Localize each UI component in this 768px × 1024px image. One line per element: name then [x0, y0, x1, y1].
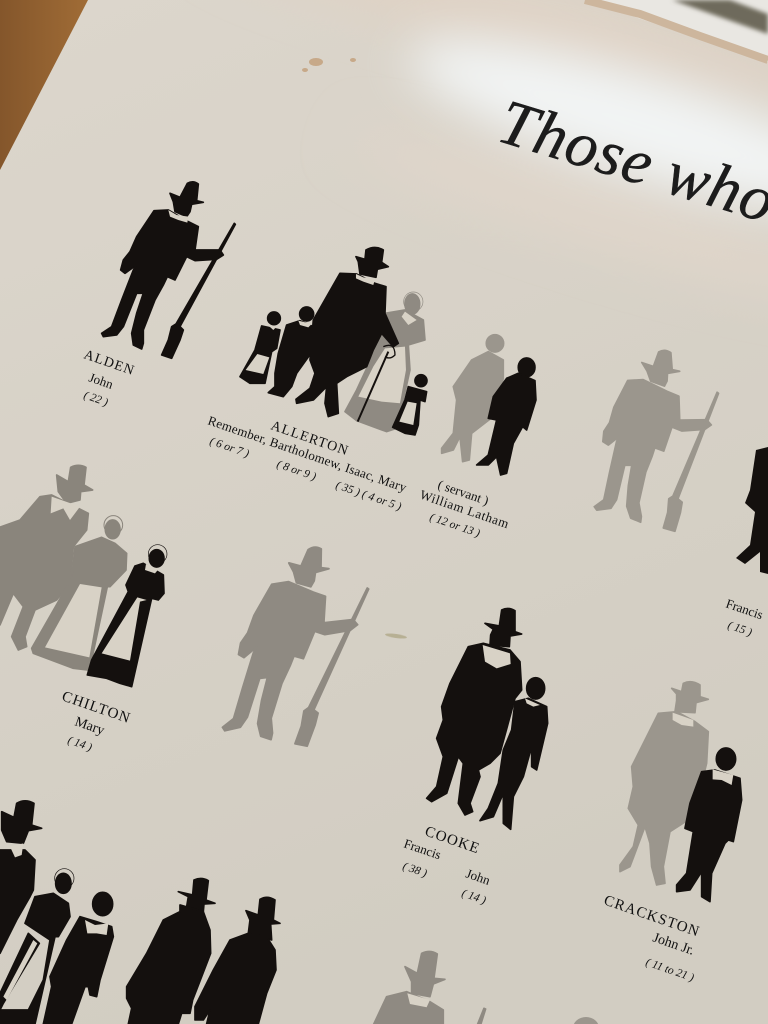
tan stain band along the top edge — [202, 0, 768, 128]
pale light glow behind the title — [396, 7, 768, 243]
label: Allerton names: ( 35 ) ( 4 or 5 ) — [334, 479, 403, 513]
collar — [168, 210, 188, 223]
John Cooke — [480, 678, 548, 829]
label: Cooke: Francis — [402, 836, 443, 862]
John Crackston Sr. in grey — [620, 682, 708, 885]
label: Allerton names: Remember, Bartholomew, Isaac, Mary — [206, 413, 409, 495]
label: Francis: ( 15 ) — [726, 619, 754, 639]
child Remember — [240, 312, 280, 383]
Mary Chilton — [87, 545, 167, 687]
label: Francis — [724, 596, 765, 639]
sword — [358, 345, 395, 422]
figure: grey musketeer, centre — [208, 542, 382, 755]
label: Cooke: ( 38 ) — [401, 860, 429, 880]
family: Cooke — [427, 608, 548, 829]
grey man with musket, cropped — [373, 951, 486, 1024]
label: Allerton names: ( 8 or 9 ) — [275, 458, 318, 483]
label: Francis: Francis — [724, 596, 765, 622]
bottom row of figures — [0, 801, 486, 1024]
label: Alden — [82, 348, 137, 409]
label: Cooke: John — [464, 866, 493, 888]
label: Alden: ( 22 ) — [82, 389, 110, 409]
John Crackston Jr. — [677, 748, 742, 902]
Francis Cooke — [427, 608, 522, 815]
child Bartholomew — [268, 307, 314, 397]
label: Chilton — [60, 689, 133, 754]
grey head, cropped at bottom — [573, 1017, 599, 1024]
family: Crackston — [620, 682, 742, 902]
window frame beyond the poster edge — [585, 0, 768, 62]
label: Allerton names — [206, 413, 511, 540]
label: Chilton: CHILTON — [60, 689, 133, 727]
family: Allerton — [240, 247, 536, 475]
label: Allerton names: William Latham — [418, 487, 511, 531]
label: Cooke: ( 14 ) — [460, 887, 488, 907]
label: Allerton names: ALLERTON — [269, 419, 351, 459]
label: Allerton names: ( 12 or 13 ) — [428, 511, 482, 540]
woman in grey — [345, 292, 425, 432]
label: Alden: John — [87, 370, 116, 392]
label: Alden: ALDEN — [82, 348, 137, 379]
label: Cooke: COOKE — [423, 824, 482, 857]
man, left edge — [0, 801, 42, 953]
wooden table corner — [0, 0, 88, 170]
man 2 — [127, 878, 215, 1024]
man in grey — [0, 465, 93, 650]
figure: grey musketeer, upper right — [566, 350, 744, 532]
child Mary — [393, 375, 427, 435]
label: Cooke — [401, 824, 493, 907]
label: Crackston: ( 11 to 21 ) — [644, 956, 696, 984]
William Latham — [477, 358, 536, 475]
family: Chilton — [0, 465, 167, 687]
woman with bonnet — [0, 869, 74, 1024]
paper stains — [302, 58, 407, 640]
man 3 — [195, 897, 280, 1024]
figure: John Alden with musket — [102, 182, 235, 358]
man Isaac — [296, 247, 398, 417]
tan stain band beneath the title — [343, 110, 768, 320]
figure: Francis, cropped at right edge — [736, 447, 768, 574]
label: Chilton: ( 14 ) — [66, 734, 94, 754]
label: Allerton names: ( servant ) — [436, 477, 491, 508]
label: Allerton names: ( 6 or 7 ) — [208, 435, 251, 460]
boy — [43, 892, 113, 1024]
adult servant in grey — [442, 335, 504, 462]
label: Chilton: Mary — [73, 715, 106, 739]
label: Crackston — [602, 893, 702, 984]
woman in grey — [32, 516, 127, 670]
label: Crackston: CRACKSTON — [602, 893, 702, 940]
label: Crackston: John Jr. — [651, 931, 696, 959]
